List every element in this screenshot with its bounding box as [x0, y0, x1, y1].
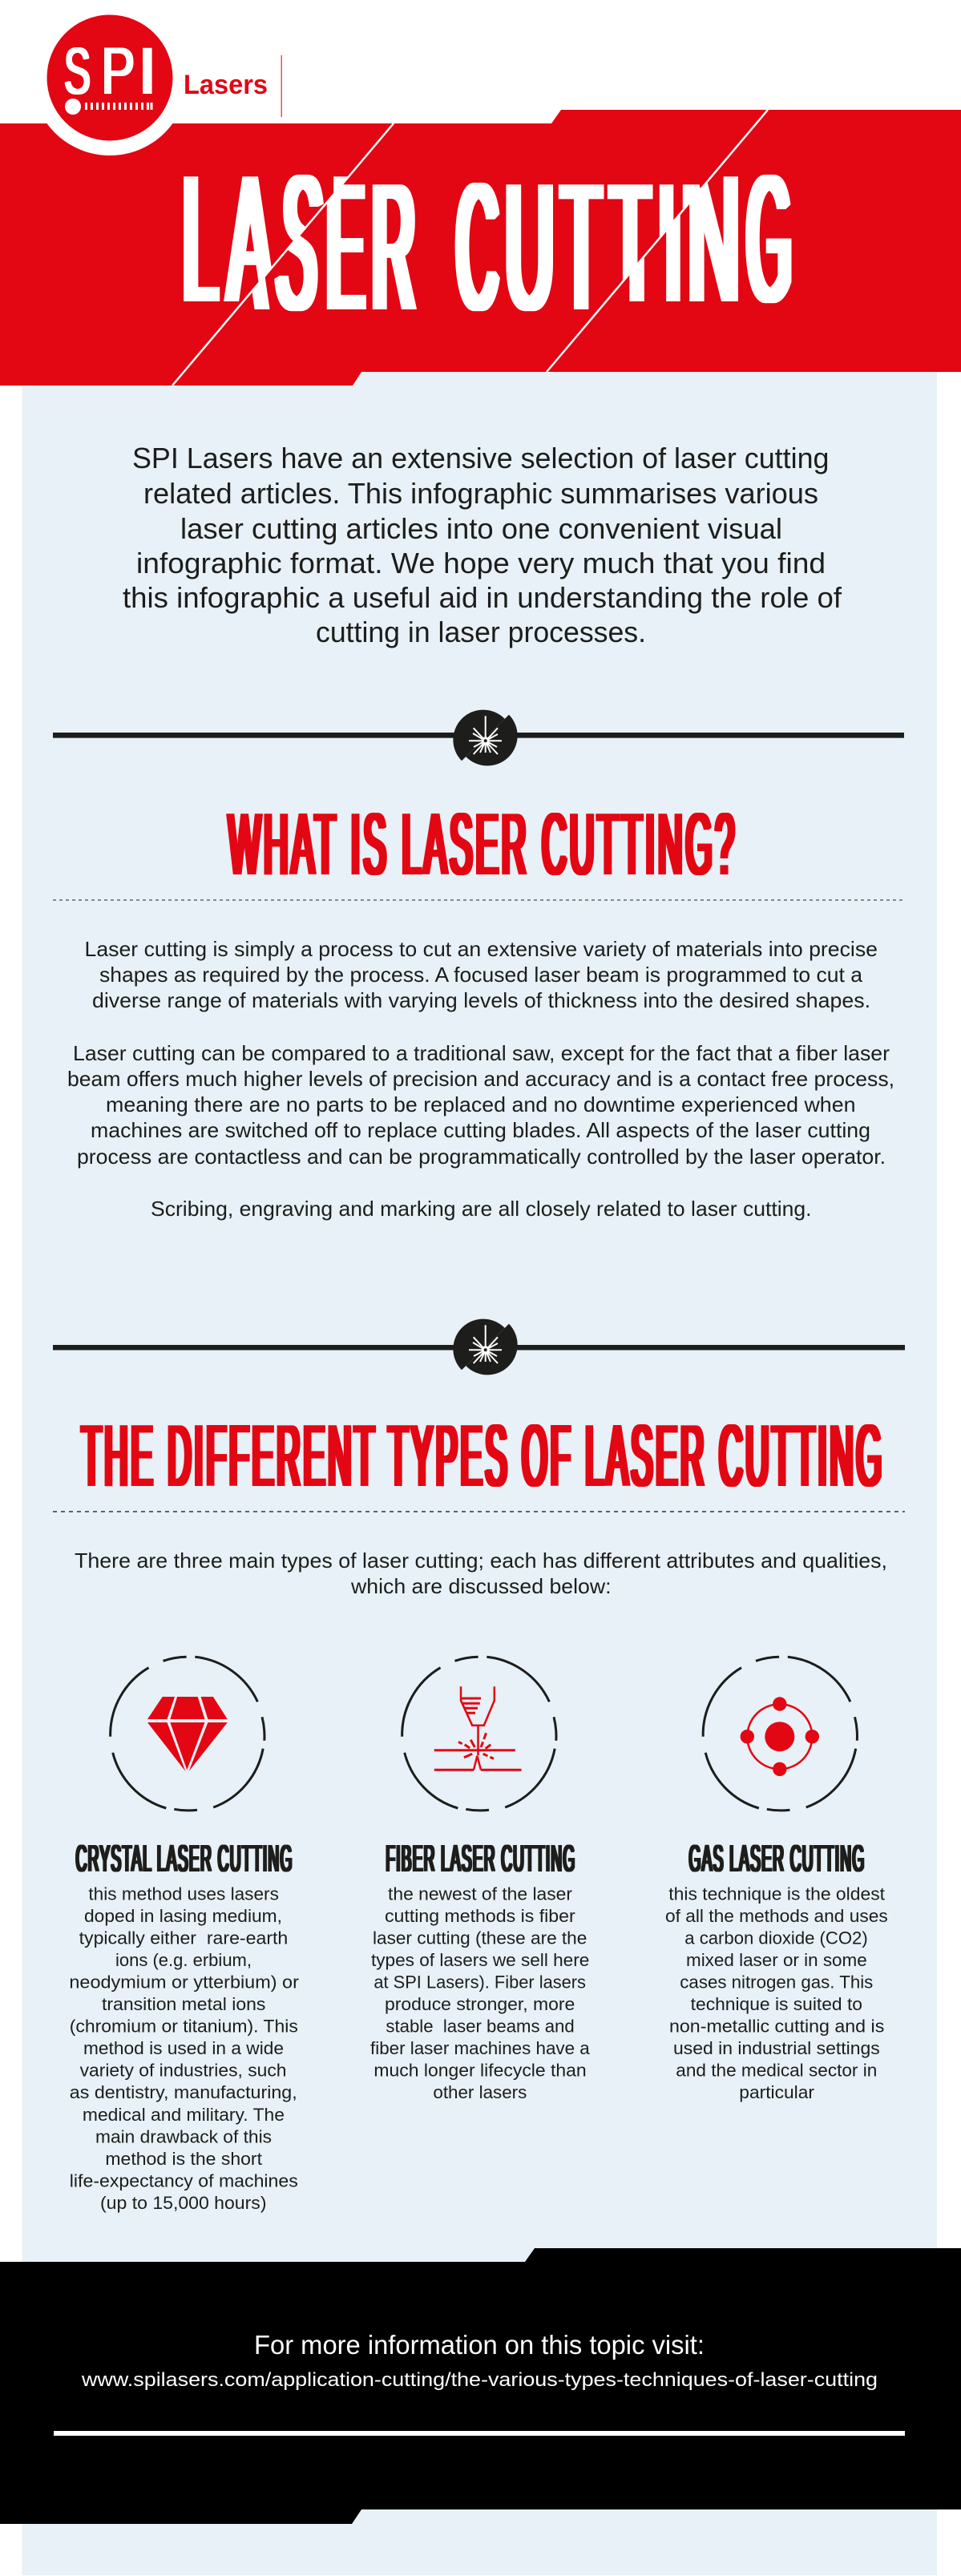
column: fiber laser cutting — [370, 1837, 590, 2102]
icon: crystal — [111, 1657, 264, 1811]
title: N — [688, 138, 740, 340]
title: R — [372, 146, 415, 348]
column: fiber laser cutting: cutting methods is fiber — [385, 1906, 575, 1926]
column: crystal laser cutting: method is used in a wide — [83, 2038, 284, 2058]
title: A — [228, 138, 273, 340]
column: crystal laser cutting: neodymium or ytterbium) or — [69, 1972, 299, 1993]
column: gas laser cutting: cases nitrogen gas. This — [680, 1972, 873, 1993]
title: E — [326, 146, 364, 348]
title: U — [512, 138, 560, 340]
column: crystal laser cutting: ions (e.g. erbium, — [115, 1950, 252, 1970]
body text: what is laser cutting: Scribing, engraving and marking are all closely related to laser cutting. — [151, 1197, 811, 1221]
column: crystal laser cutting: method is the short — [105, 2149, 262, 2169]
body text: what is laser cutting: diverse range of materials with varying levels of thickness into the desired shapes. — [92, 988, 870, 1012]
column: gas laser cutting: used in industrial settings — [673, 2038, 880, 2058]
title: T — [562, 146, 601, 348]
column: crystal laser cutting: variety of industries, such — [80, 2060, 286, 2081]
icon: gas laser — [703, 1657, 857, 1811]
column: gas laser cutting: and the medical sector in — [676, 2060, 877, 2081]
intro text: SPI Lasers have an extensive selection of laser cutting — [132, 442, 829, 474]
column: fiber laser cutting: other lasers — [433, 2082, 527, 2102]
title: S — [276, 146, 317, 348]
footer text — [81, 2330, 878, 2391]
column: crystal laser cutting: as dentistry, manufacturing, — [70, 2082, 297, 2102]
title: U — [505, 146, 554, 348]
icon: fiber laser — [402, 1657, 556, 1811]
body text: what is laser cutting — [67, 937, 894, 1221]
column: fiber laser cutting: much longer lifecycle than — [373, 2060, 587, 2081]
body text: what is laser cutting: beam offers much higher levels of precision and accuracy and is a contact free process, — [67, 1067, 894, 1091]
divider with laser icon — [53, 710, 904, 765]
column: gas laser cutting: particular — [739, 2082, 814, 2102]
intro text: cutting in laser processes. — [316, 616, 646, 648]
title: N — [681, 146, 733, 348]
column: crystal laser cutting: life-expectancy of machines — [70, 2170, 298, 2190]
column: fiber laser cutting: stable laser beams and — [386, 2017, 575, 2036]
title: I — [665, 138, 681, 340]
intro text: infographic format. We hope very much that you find — [136, 547, 826, 579]
title: C — [463, 138, 505, 340]
logo: I — [137, 35, 157, 107]
types intro text: There are three main types of laser cutting; each has different attributes and qualities, — [75, 1548, 887, 1573]
title: I — [659, 146, 674, 348]
logo: P — [101, 35, 135, 107]
column: gas laser cutting: this technique is the oldest — [668, 1884, 885, 1904]
text: G — [747, 138, 791, 340]
column: fiber laser cutting: fiber laser machines have a — [370, 2038, 590, 2058]
column: gas laser cutting: non-metallic cutting and is — [669, 2017, 884, 2036]
title: E — [333, 138, 371, 340]
footer text: For more information on this topic visit: — [254, 2330, 705, 2360]
column: fiber laser cutting: laser cutting (these are the — [373, 1928, 587, 1948]
column: crystal laser cutting: this method uses lasers — [88, 1884, 279, 1904]
column: crystal laser cutting: transition metal ions — [102, 1994, 265, 2014]
column: crystal laser cutting: (chromium or titanium). This — [70, 2017, 298, 2036]
title: C — [457, 146, 498, 348]
body text: what is laser cutting: process are contactless and can be programmatically controlled by the laser operator. — [77, 1145, 886, 1169]
column: crystal laser cutting: (up to 15,000 hours) — [100, 2193, 266, 2213]
column: crystal laser cutting: typically either rare-earth — [79, 1928, 288, 1948]
logo: S — [64, 35, 91, 107]
title: R — [379, 138, 422, 340]
divider with laser icon — [53, 1319, 905, 1375]
footer text: www.spilasers.com/application-cutting/the-various-types-techniques-of-laser-cutting — [81, 2369, 878, 2391]
column: crystal laser cutting: medical and military. The — [83, 2105, 285, 2125]
types intro text: which are discussed below: — [350, 1574, 611, 1598]
title: T — [611, 146, 650, 348]
body text: what is laser cutting: machines are switched off to replace cutting blades. All aspects of the laser cutting — [91, 1118, 870, 1142]
intro text: related articles. This infographic summarises various — [143, 477, 818, 510]
text: FIBER LASER CUTTING — [386, 1837, 575, 1879]
logo: Lasers — [184, 70, 268, 100]
logo — [32, 0, 282, 155]
title: A — [221, 146, 265, 348]
column: gas laser cutting — [665, 1837, 888, 2102]
title: L — [176, 146, 211, 348]
body text: what is laser cutting: Laser cutting can be compared to a traditional saw, except for the fact that a fiber laser — [73, 1041, 890, 1065]
title — [184, 175, 792, 311]
title: S — [283, 138, 323, 340]
title: T — [617, 138, 656, 340]
intro text — [123, 442, 842, 648]
header banner — [0, 110, 961, 386]
column: fiber laser cutting: produce stronger, more — [385, 1994, 575, 2014]
body text: what is laser cutting: meaning there are no parts to be replaced and no downtime experienced when — [106, 1092, 856, 1116]
column: gas laser cutting: technique is suited to — [691, 1994, 862, 2014]
column: fiber laser cutting: types of lasers we sell here — [371, 1950, 589, 1970]
column: crystal laser cutting: doped in lasing medium, — [84, 1906, 282, 1926]
body text: what is laser cutting: Laser cutting is simply a process to cut an extensive variety of materials into precise — [85, 937, 878, 961]
types intro text — [75, 1548, 887, 1598]
title: T — [568, 138, 608, 340]
column: fiber laser cutting: the newest of the laser — [388, 1884, 572, 1904]
intro text: this infographic a useful aid in understanding the role of — [123, 581, 842, 614]
text: CRYSTAL LASER CUTTING — [75, 1837, 293, 1879]
text: G — [741, 146, 785, 348]
title: L — [183, 138, 217, 340]
column: gas laser cutting: of all the methods and uses — [665, 1906, 888, 1926]
footer banner — [0, 2248, 961, 2524]
intro text: laser cutting articles into one convenient visual — [180, 512, 782, 545]
body text: what is laser cutting: shapes as required by the process. A focused laser beam is programmed to cut a — [99, 963, 863, 987]
column: gas laser cutting: a carbon dioxide (CO2) — [684, 1928, 868, 1948]
column: crystal laser cutting — [69, 1837, 299, 2213]
column: crystal laser cutting: main drawback of this — [95, 2126, 272, 2146]
column: gas laser cutting: mixed laser or in some — [686, 1950, 867, 1970]
column: fiber laser cutting: at SPI Lasers). Fiber lasers — [373, 1972, 586, 1993]
